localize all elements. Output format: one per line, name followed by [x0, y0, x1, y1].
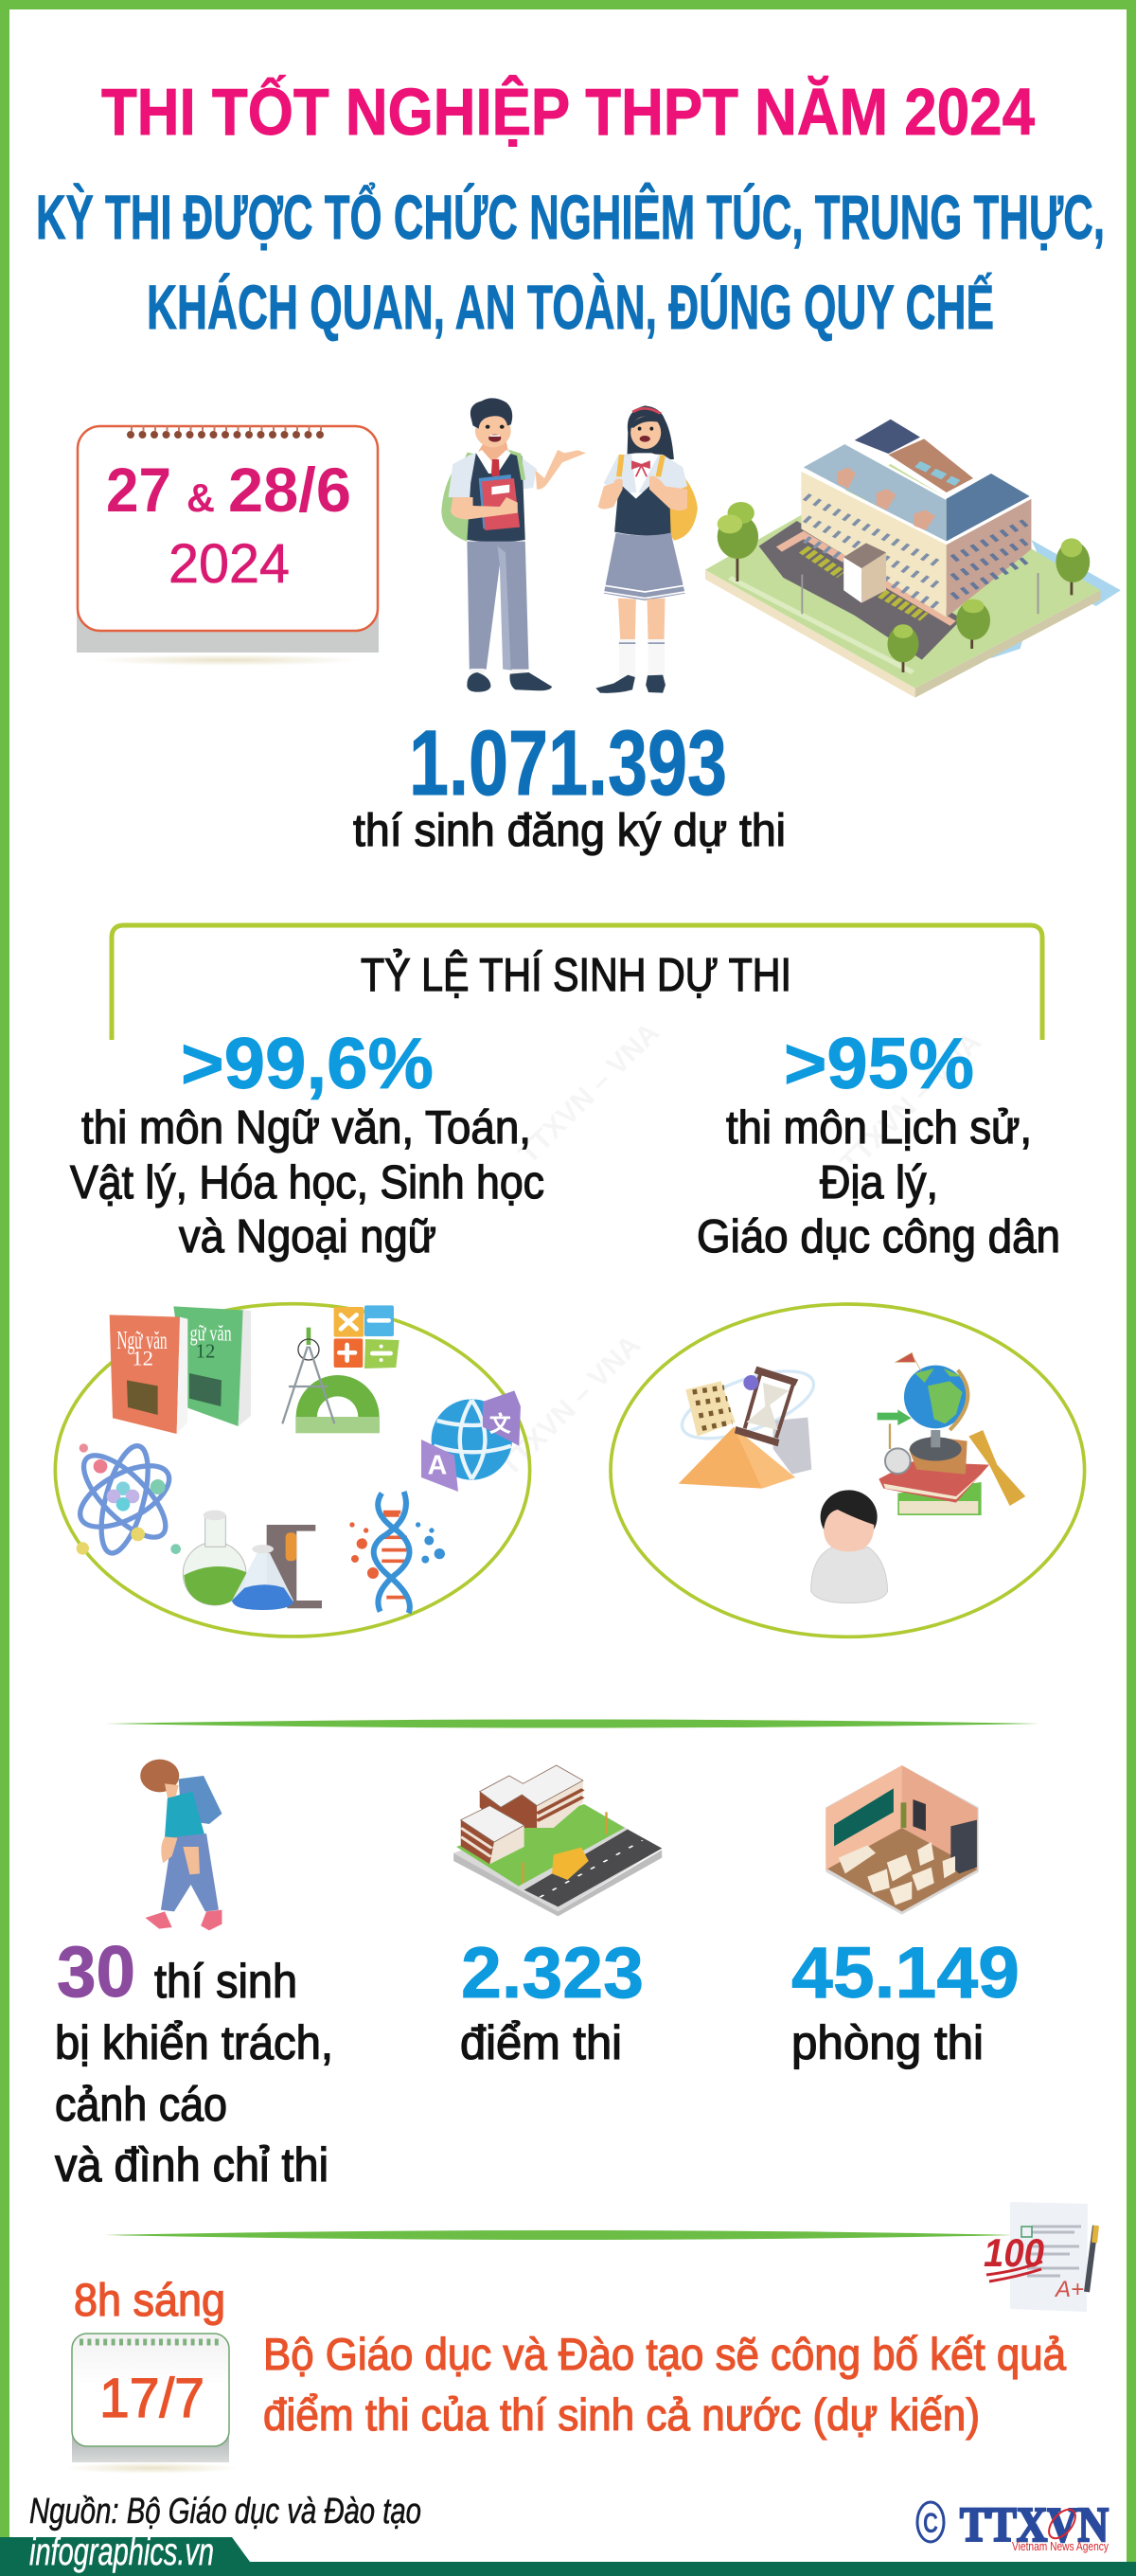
footer bar: infographics.vn: [29, 2530, 214, 2573]
bracket heading: participation rate: [112, 925, 1042, 1040]
title: THI TỐT NGHIỆP THPT NĂM 2024: [101, 74, 1035, 149]
icon: person: [811, 1490, 888, 1603]
logo: TTXVN: Vietnam News Agency: [1012, 2539, 1109, 2553]
watermark: TTXVN – VNA: [513, 1017, 666, 1170]
ellipse: subject icons right: [611, 1304, 1085, 1637]
icon: textbooks: Ngữ văn: [116, 1326, 168, 1354]
watermark: TTXVN – VNA: [494, 1330, 647, 1482]
icon: history monuments: [674, 1357, 822, 1489]
tree: [718, 502, 758, 581]
divider: [105, 1720, 1039, 1727]
callout: result time: [64, 2276, 239, 2474]
statistic: registered candidates: [353, 711, 786, 856]
column: over 95 percent: Giáo dục công dân: [697, 1211, 1060, 1262]
column: over 99.6 percent: [70, 1024, 544, 1262]
statistic: 30 candidates: thí sinh: [154, 1955, 297, 2008]
source: Nguồn: Bộ Giáo dục và Đào tạo: [29, 2492, 421, 2531]
calendar: exam dates: 2024: [169, 533, 290, 595]
icon: language globe: [421, 1390, 521, 1492]
icon: textbooks: 12: [196, 1341, 215, 1362]
icon: calendar 17/7: [64, 2334, 239, 2474]
statistic: exam rooms: 45.149: [791, 1933, 1020, 2013]
tree: [1056, 538, 1090, 595]
statistic: registered candidates: 1.071.393: [409, 711, 727, 814]
footer bar: [0, 2530, 1136, 2576]
column: over 95 percent: [697, 1024, 1060, 1262]
logo: TTXVN: [917, 2498, 1109, 2553]
callout: result time: 8h sáng: [74, 2276, 225, 2326]
logo: TTXVN: C: [923, 2508, 938, 2539]
bracket heading: participation rate: TỶ LỆ THÍ SINH DỰ THI: [361, 949, 791, 1001]
text: result announcement: điểm thi của thí sinh cả nước (dự kiến): [263, 2389, 980, 2440]
icon: DNA helix: [349, 1492, 445, 1613]
icon: globe and books: [878, 1352, 1025, 1515]
icon: sad student: [140, 1760, 222, 1930]
text: result announcement: Bộ Giáo dục và Đào tạo sẽ công bố kết quả: [263, 2329, 1067, 2379]
column: over 99.6 percent: thi môn Ngữ văn, Toán,: [81, 1102, 531, 1154]
column: over 99.6 percent: >99,6%: [181, 1024, 434, 1104]
calendar: exam dates: [77, 426, 379, 666]
column: over 95 percent: thi môn Lịch sử,: [726, 1102, 1032, 1154]
column: over 99.6 percent: Vật lý, Hóa học, Sinh học: [70, 1157, 544, 1208]
statistic: 30 candidates: cảnh cáo: [55, 2078, 227, 2131]
divider: [105, 2230, 1015, 2240]
calendar: exam dates: 28/6: [228, 455, 351, 525]
icon: scored test paper: 100: [984, 2230, 1044, 2275]
icon: textbooks: 12: [132, 1347, 153, 1370]
icon: language globe: 文: [489, 1406, 511, 1439]
illustration: boy student: [441, 398, 586, 692]
ellipse: subject icons left: [55, 1304, 530, 1637]
icon: exam room: [825, 1765, 979, 1915]
icon: calendar 17/7: 17/7: [99, 2368, 204, 2429]
icon: compass and protractor: [282, 1328, 380, 1433]
statistic: registered candidates: thí sinh đăng ký dự thi: [353, 806, 786, 856]
statistic: 30 candidates: và đình chỉ thi: [55, 2138, 328, 2191]
icon: language globe: A: [428, 1451, 447, 1481]
icon: textbooks: [110, 1306, 251, 1434]
icon: exam site: [453, 1765, 662, 1916]
column: over 95 percent: Địa lý,: [820, 1157, 938, 1208]
statistic: 30 candidates: [55, 1932, 333, 2191]
icon: lab flasks: [183, 1511, 322, 1610]
icon: textbooks: gữ văn: [190, 1321, 232, 1347]
icon: math tiles: [334, 1305, 399, 1368]
statistic: exam rooms: [791, 1933, 1020, 2069]
calendar: exam dates: 27: [106, 455, 171, 525]
logo: TTXVN: TTXVN: [960, 2498, 1109, 2552]
title: [36, 74, 1105, 342]
tree: [956, 599, 990, 649]
statistic: exam sites: 2.323: [461, 1933, 644, 2013]
icon: atom: [71, 1441, 181, 1558]
statistic: exam sites: [460, 1933, 644, 2069]
icon: scored test paper: A+: [1054, 2277, 1084, 2302]
statistic: exam sites: điểm thi: [460, 2016, 622, 2069]
illustration: girl student: [595, 405, 698, 693]
statistic: exam rooms: phòng thi: [791, 2016, 984, 2069]
watermark: [494, 1017, 987, 1482]
column: over 99.6 percent: và Ngoại ngữ: [179, 1211, 436, 1262]
column: over 95 percent: >95%: [784, 1024, 974, 1104]
icon: scored test paper: [984, 2202, 1096, 2312]
watermark: TTXVN – VNA: [835, 1027, 987, 1179]
statistic: 30 candidates: 30: [57, 1932, 135, 2012]
statistic: 30 candidates: bị khiển trách,: [55, 2016, 333, 2069]
tree: [887, 624, 919, 672]
illustration: school building: [705, 419, 1121, 698]
text: result announcement: [263, 2329, 1067, 2440]
calendar: exam dates: &: [186, 475, 215, 520]
